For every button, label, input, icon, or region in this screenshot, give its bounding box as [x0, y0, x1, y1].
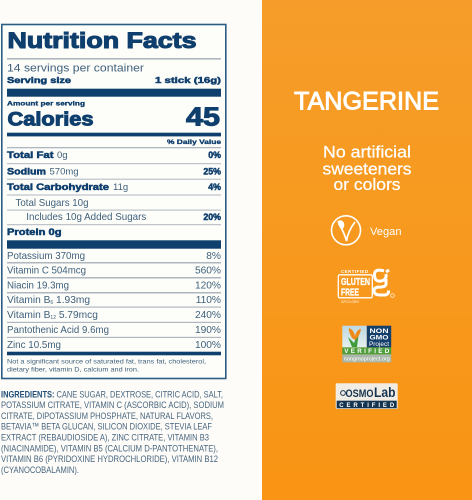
row: total fat: Total Fat: [7, 150, 54, 160]
row: total carbohydrate: 4%: [208, 182, 221, 192]
heading: Nutrition Facts: Nutrition Facts: [8, 28, 196, 53]
calories row: [8, 101, 220, 131]
row: vitamin B6: [7, 295, 221, 306]
ingredients text block: CITRATE, DIPOTASSIUM PHOSPHATE, NATURAL FLAVORS,: [1, 411, 213, 422]
footnote: [7, 358, 206, 374]
serving size row: 1 stick (16g): [155, 75, 221, 85]
ingredients text block: [1, 389, 224, 476]
row: protein: Protein 0g: [7, 227, 62, 237]
row: niacin: 120%: [195, 281, 221, 292]
row: total carbohydrate: 11g: [113, 182, 128, 193]
badge: non gmo project verified: GMO: [370, 335, 388, 342]
row: vitamin B6: Vitamin B: [7, 295, 50, 306]
row: vitamin C: 560%: [195, 266, 221, 277]
row: niacin: [7, 281, 221, 292]
badge: non gmo project verified: nongmoproject.org: [344, 357, 390, 363]
row: added sugars: 20%: [203, 212, 221, 222]
ingredients text block: BETAVIA™ BETA GLUCAN, SILICON DIOXIDE, STEVIA LEAF: [1, 422, 212, 433]
icon: vegan: [332, 216, 360, 245]
row: pantothenic acid: 190%: [195, 325, 221, 336]
row: total fat: 0g: [57, 150, 68, 161]
heading: Tangerine: TANGERINE: [294, 87, 439, 115]
row: pantothenic acid: [7, 325, 221, 336]
row: zinc: 100%: [195, 340, 221, 351]
badge: non gmo project verified: VERIFIED: [344, 348, 390, 355]
row: potassium: [7, 251, 221, 262]
serving size row: [7, 75, 221, 85]
row: potassium: 8%: [206, 251, 221, 262]
row: vitamin B12: 240%: [195, 310, 221, 321]
row: pantothenic acid: Pantothenic Acid 9.6mg: [7, 325, 109, 336]
badge: non gmo project verified: Project: [369, 342, 389, 348]
row: vitamin B12: 5.79mcg: [56, 310, 98, 321]
row: vitamin B12: [7, 310, 221, 321]
row: potassium: Potassium 370mg: [7, 251, 85, 262]
row: total sugars: Total Sugars 10g: [16, 198, 89, 209]
claim: no artificial sweeteners: or colors: [334, 175, 400, 194]
row: total carbohydrate: [7, 182, 221, 193]
ingredients text block: EXTRACT (REBAUDIOSIDE A), ZINC CITRATE, VITAMIN B3: [1, 432, 209, 444]
row: vitamin C: Vitamin C 504mcg: [7, 266, 86, 277]
row: vitamin B12: Vitamin B: [7, 310, 50, 321]
ingredients text block: VITAMIN B6 (PYRIDOXINE HYDROCHLORIDE), VITAMIN B12: [1, 454, 218, 465]
badge: osmolab certified: OSMO: [346, 388, 374, 400]
panel: orange flavor panel: [262, 0, 472, 500]
row: total carbohydrate: Total Carbohydrate: [7, 182, 109, 192]
badge: osmolab certified: [336, 383, 398, 409]
row: vitamin B6: 6: [50, 300, 53, 306]
row: sodium: 570mg: [50, 167, 79, 178]
row: sodium: 25%: [203, 167, 221, 177]
badge: non gmo project verified: NON: [370, 328, 389, 335]
row: zinc: Zinc 10.5mg: [7, 340, 61, 351]
row: added sugars: Includes 10g Added Sugars: [26, 212, 146, 223]
servings per container: 14 servings per container: [7, 63, 144, 75]
row: niacin: Niacin 19.3mg: [7, 281, 69, 292]
row: zinc: [7, 340, 221, 351]
badge: certified gluten free: GFCO.ORG: [341, 300, 360, 304]
label: vegan: Vegan: [370, 226, 402, 238]
badge: certified gluten free: FREE: [341, 288, 359, 298]
panel: nutrition facts label: [2, 24, 226, 378]
row: total fat: [7, 150, 221, 161]
ingredients text block: (NIACINAMIDE), VITAMIN B5 (CALCIUM D-PANTOTHENATE),: [1, 443, 218, 454]
calories row: Calories: [8, 109, 94, 130]
badge: non gmo project verified: [342, 326, 391, 363]
claim: no artificial sweeteners: [322, 143, 412, 194]
row: added sugars: [26, 212, 221, 223]
footnote: Not a significant source of saturated fat, trans fat, cholesterol,: [7, 358, 206, 365]
badge: certified gluten free: [338, 269, 394, 304]
badge: certified gluten free: CERTIFIED: [341, 269, 368, 274]
ingredients text block: INGREDIENTS: CANE SUGAR, DEXTROSE, CITRIC ACID, SALT,: [1, 389, 223, 400]
ingredients text block: (CYANOCOBALAMIN).: [1, 465, 79, 476]
row: total fat: 0%: [208, 150, 221, 160]
amount per serving: Amount per serving: [7, 102, 85, 108]
row: vitamin B6: 110%: [196, 295, 221, 306]
row: vitamin C: [7, 266, 221, 277]
row: vitamin B6: 1.93mg: [53, 295, 90, 306]
claim: no artificial sweeteners: sweeteners: [322, 159, 412, 178]
ingredients text block: POTASSIUM CITRATE, VITAMIN C (ASCORBIC ACID), SODIUM: [1, 400, 224, 411]
row: vitamin B12: 12: [50, 315, 56, 321]
calories row: 45: [186, 101, 220, 131]
row: sodium: Sodium: [7, 167, 46, 177]
badge: certified gluten free: GLUTEN: [341, 277, 370, 288]
serving size row: Serving size: [7, 75, 71, 85]
footnote: dietary fiber, vitamin D, calcium and iron.: [7, 367, 139, 374]
daily value header: % Daily Value: [167, 139, 222, 146]
badge: osmolab certified: Lab: [374, 384, 396, 400]
claim: no artificial sweeteners: No artificial: [323, 143, 411, 162]
badge: osmolab certified: CERTIFIED: [339, 403, 395, 409]
row: sodium: [7, 167, 221, 178]
